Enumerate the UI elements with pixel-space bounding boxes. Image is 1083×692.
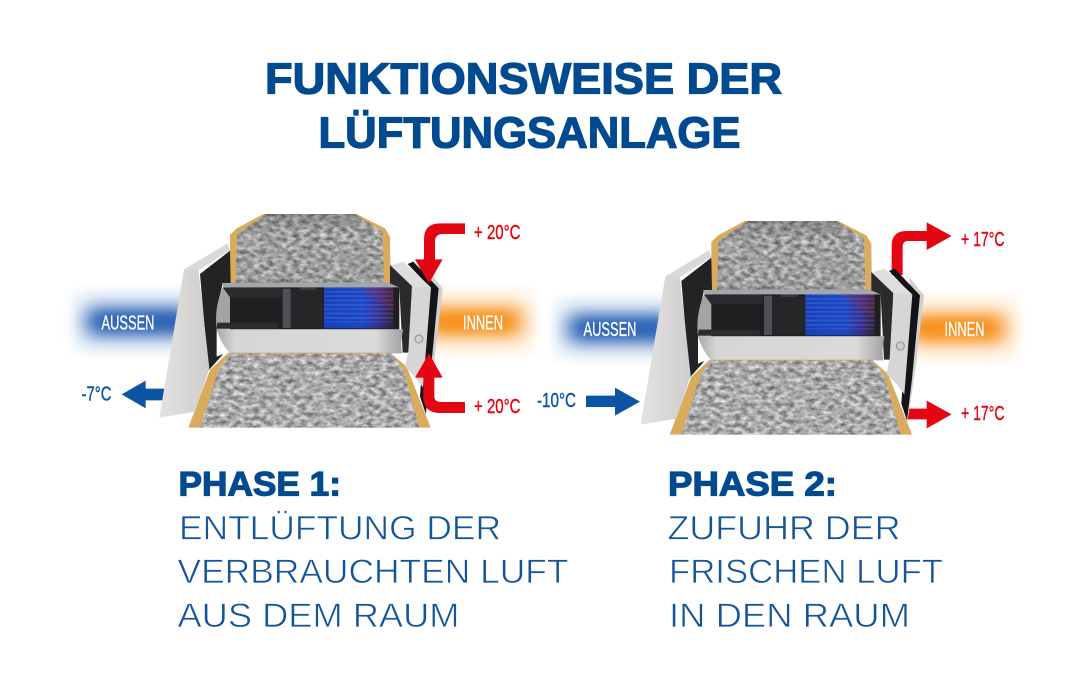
device: ventilation unit in wall [159, 214, 443, 428]
glow: aussen [555, 296, 673, 361]
label: -10: -10°C [537, 389, 576, 412]
title [265, 54, 782, 158]
text block: phase 1: AUS DEM RAUM [178, 597, 460, 635]
label: +20 bottom: + 20°C [474, 395, 521, 418]
text block: phase 1: PHASE 1: [178, 466, 341, 504]
title: FUNKTIONSWEISE DER [265, 54, 782, 104]
label: +17 top: + 17°C [961, 228, 1005, 251]
panel: phase 1 diagram [73, 214, 535, 428]
label: -7: -7°C [82, 382, 112, 406]
panel: phase 2 diagram [537, 221, 1018, 435]
text block: phase 1: ENTLÜFTUNG DER [179, 510, 501, 548]
arrow: warm air in bottom [415, 353, 465, 413]
arrow: cold air in [586, 388, 640, 416]
arrow: warm air in top [415, 223, 465, 283]
text block: phase 2: FRISCHEN LUFT [669, 553, 943, 591]
label: innen: INNEN [944, 318, 984, 341]
device: ventilation unit in wall [641, 221, 924, 435]
label: aussen: AUSSEN [102, 312, 154, 334]
label: +17 bottom: + 17°C [961, 402, 1005, 425]
text block: phase 1 [178, 466, 568, 635]
text block: phase 2: ZUFUHR DER [668, 510, 900, 548]
text block: phase 2 [668, 466, 943, 635]
arrow: warm air out top [892, 222, 952, 275]
glow: aussen [73, 289, 192, 354]
glow: innen [910, 294, 1018, 364]
title: LÜFTUNGSANLAGE [318, 108, 740, 158]
arrow: warm air out bottom [907, 401, 952, 428]
text block: phase 1: VERBRAUCHTEN LUFT [178, 553, 568, 591]
label: aussen: AUSSEN [584, 318, 636, 341]
label: innen: INNEN [463, 312, 503, 334]
text block: phase 2: IN DEN RAUM [669, 597, 910, 635]
glow: innen [427, 287, 535, 357]
arrow: outgoing cold air [122, 381, 167, 408]
label: +20 top: + 20°C [474, 221, 521, 244]
text block: phase 2: PHASE 2: [668, 466, 837, 504]
